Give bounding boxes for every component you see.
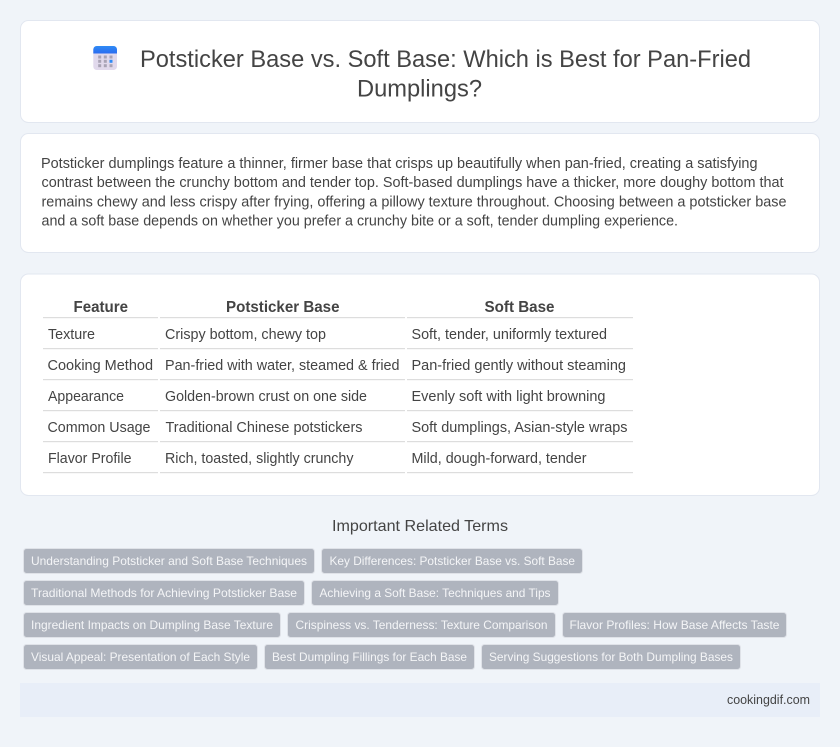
- title: [140, 46, 751, 102]
- row: texture: Texture: [48, 327, 95, 343]
- row: texture: [48, 327, 607, 343]
- panel: comparison table: [20, 274, 820, 496]
- table header: Potsticker Base: [226, 299, 340, 316]
- text block: summary: Potsticker dumplings feature a thinner, firmer base that crisps up beautifully when pan-fried, creating a satisfying: [41, 156, 757, 172]
- footer: cookingdif.com: [727, 692, 810, 707]
- row: appearance: Appearance: [48, 389, 124, 405]
- row: common usage: [48, 420, 628, 436]
- row: flavor profile: Mild, dough-forward, tender: [412, 451, 587, 467]
- row: flavor profile: Flavor Profile: [48, 451, 132, 467]
- tags: related terms: Serving Suggestions for Both Dumpling Bases: [489, 650, 733, 664]
- tags: related terms: Traditional Methods for Achieving Potsticker Base: [31, 586, 297, 600]
- row: flavor profile: Rich, toasted, slightly crunchy: [165, 451, 354, 467]
- row: cooking method: Pan-fried gently without steaming: [412, 358, 626, 374]
- table header: [74, 299, 555, 316]
- tags: related terms: Achieving a Soft Base: Techniques and Tips: [320, 586, 550, 600]
- row: cooking method: Cooking Method: [48, 358, 153, 374]
- row: cooking method: Pan-fried with water, steamed & fried: [165, 358, 400, 374]
- row: appearance: [48, 389, 606, 405]
- text block: summary: contrast between the crunchy bottom and tender top. Soft-based dumplings have a thicker, more doughy bottom that: [42, 175, 783, 191]
- table header: Soft Base: [484, 299, 555, 316]
- heading: important related terms: Important Related Terms: [332, 518, 508, 535]
- text block: summary: remains chewy and less crispy after frying, offering a pillowy texture throughout. Choosing between a potsticker base: [42, 194, 787, 210]
- row: common usage: Soft dumplings, Asian-style wraps: [412, 420, 628, 436]
- row: appearance: Golden-brown crust on one side: [165, 389, 367, 405]
- row: flavor profile: [48, 451, 587, 467]
- row: appearance: Evenly soft with light browning: [412, 389, 606, 405]
- row: cooking method: [48, 358, 626, 374]
- tags: related terms: [24, 548, 786, 670]
- text block: summary: and a soft base depends on whether you prefer a crunchy bite or a soft, tender dumpling experience.: [42, 214, 678, 230]
- panel: summary paragraph: [20, 134, 820, 252]
- tags: related terms: Understanding Potsticker and Soft Base Techniques: [31, 554, 307, 568]
- text block: summary: [41, 156, 787, 230]
- tags: related terms: Ingredient Impacts on Dumpling Base Texture: [31, 618, 273, 632]
- row: texture: Crispy bottom, chewy top: [165, 327, 326, 343]
- tags: related terms: Best Dumpling Fillings for Each Base: [272, 650, 467, 664]
- tags: related terms: Visual Appeal: Presentation of Each Style: [31, 650, 250, 664]
- tags: related terms: Crispiness vs. Tenderness: Texture Comparison: [296, 618, 548, 632]
- panel: header: [20, 20, 820, 122]
- table header: Feature: [74, 299, 128, 316]
- title: Dumplings?: [357, 76, 482, 102]
- row: common usage: Common Usage: [48, 420, 150, 436]
- row: common usage: Traditional Chinese potstickers: [166, 420, 362, 436]
- footer: [20, 683, 820, 717]
- tags: related terms: Key Differences: Potsticker Base vs. Soft Base: [330, 554, 575, 568]
- tags: related terms: Flavor Profiles: How Base Affects Taste: [570, 618, 780, 632]
- row: texture: Soft, tender, uniformly textured: [412, 327, 607, 343]
- icon: calendar: [93, 46, 117, 70]
- title: Potsticker Base vs. Soft Base: Which is Best for Pan-Fried: [140, 46, 751, 73]
